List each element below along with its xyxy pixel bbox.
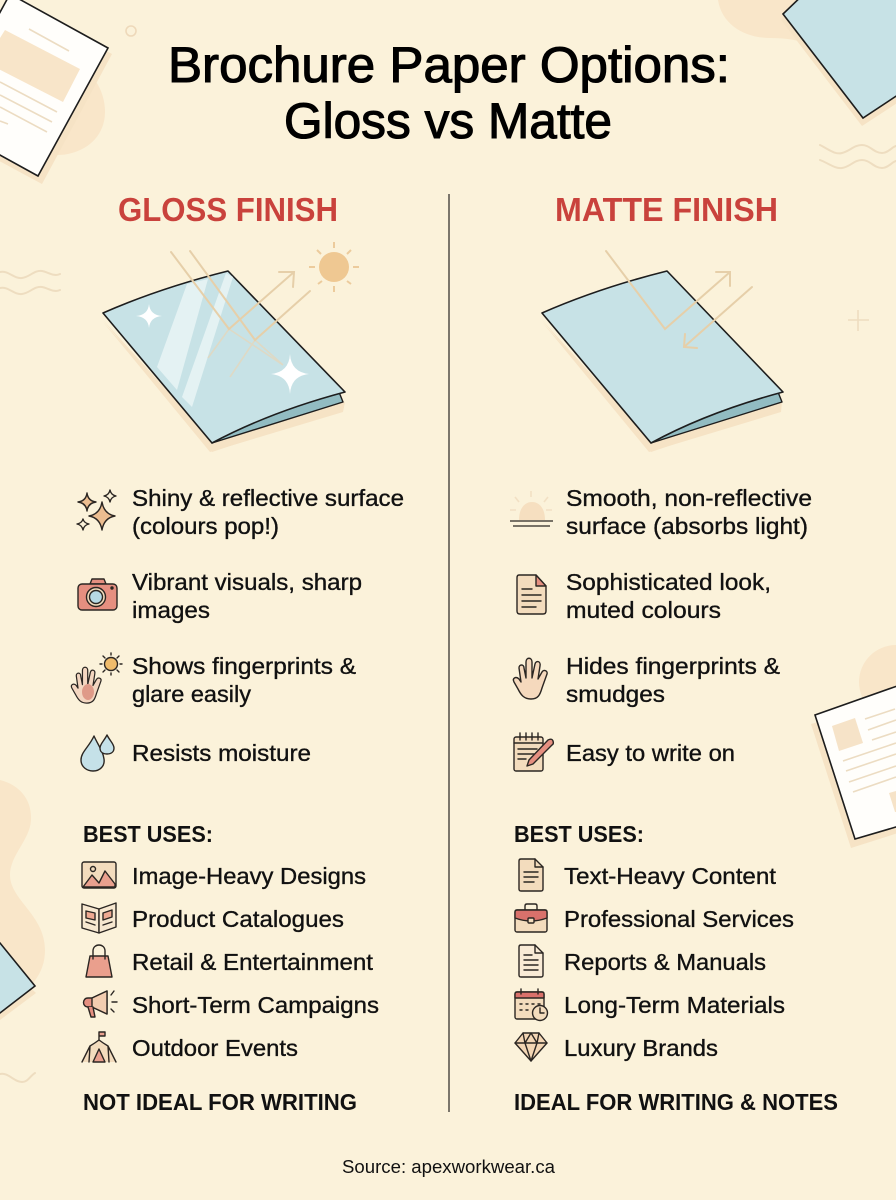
matte best uses <box>514 821 794 1061</box>
feature: sophisticated <box>517 569 771 623</box>
icon: shopping bag <box>86 945 112 977</box>
use: text-heavy content: Text-Heavy Content <box>564 863 777 889</box>
decoration: top-right paper <box>718 0 896 126</box>
icon: hand <box>513 658 547 699</box>
icon: text document <box>519 859 543 891</box>
use: long-term materials: Long-Term Materials <box>564 992 785 1018</box>
icon: document <box>517 575 546 614</box>
decoration: right paper <box>811 645 896 848</box>
use: luxury brands <box>515 1033 718 1061</box>
decoration: top-right waves <box>820 145 896 168</box>
use: retail and entertainment: Retail & Entertainment <box>132 949 374 975</box>
icon: sparkles <box>77 490 116 530</box>
use: product catalogues <box>82 903 344 933</box>
use: reports and manuals: Reports & Manuals <box>564 949 766 975</box>
note: ideal for writing: IDEAL FOR WRITING & NOTES <box>514 1089 838 1115</box>
feature: moisture <box>81 735 311 771</box>
icon: briefcase <box>515 904 547 932</box>
feature: hides fingerprints: smudges <box>566 681 665 707</box>
decoration: left waves <box>0 271 60 294</box>
feature: vibrant: images <box>132 597 210 623</box>
title <box>168 37 730 149</box>
feature: sophisticated: Sophisticated look, <box>566 569 771 595</box>
use: reports and manuals <box>519 945 766 977</box>
source line: Source: apexworkwear.ca <box>342 1157 556 1177</box>
heading: gloss finish: GLOSS FINISH <box>118 191 338 228</box>
heading: matte finish: MATTE FINISH <box>555 191 778 228</box>
decoration: small circle <box>126 26 136 36</box>
feature: fingerprints: glare easily <box>132 681 252 707</box>
use: image-heavy designs: Image-Heavy Designs <box>132 863 366 889</box>
feature: shiny <box>77 485 404 539</box>
icon: notepad and pen <box>514 733 553 771</box>
feature: shiny: Shiny & reflective surface <box>132 485 404 511</box>
icon: open catalogue <box>82 903 116 933</box>
icon: camera <box>78 579 117 610</box>
use: outdoor events: Outdoor Events <box>132 1035 298 1061</box>
icon: report <box>519 945 543 977</box>
feature: sophisticated: muted colours <box>566 597 721 623</box>
use: text-heavy content <box>519 859 777 891</box>
center divider <box>448 194 450 1112</box>
panel: matte finish <box>510 191 838 1115</box>
feature: non-reflective <box>510 485 812 539</box>
feature: hides fingerprints <box>513 653 780 707</box>
use: outdoor events <box>82 1032 298 1062</box>
icon: water drops <box>81 735 114 771</box>
use: professional services: Professional Services <box>564 906 794 932</box>
feature: moisture: Resists moisture <box>132 740 311 766</box>
decoration: bottom-left wave <box>0 1073 35 1082</box>
panel: gloss finish <box>71 191 404 1115</box>
subheading: best uses: BEST USES: <box>514 821 644 847</box>
use: retail and entertainment <box>86 945 374 977</box>
feature: non-reflective: Smooth, non-reflective <box>566 485 812 511</box>
icon: sun <box>309 242 359 292</box>
icon: sun on horizon <box>510 491 553 526</box>
icon: calendar and clock <box>515 989 548 1020</box>
icon: picture <box>82 862 116 888</box>
illustration: glossy brochure <box>103 242 359 452</box>
use: long-term materials <box>515 989 785 1020</box>
feature: easy to write on: Easy to write on <box>566 740 735 766</box>
icon: tent <box>82 1032 116 1062</box>
decoration: bottom-left paper <box>0 780 45 1020</box>
title: Brochure Paper Options: <box>168 37 730 93</box>
gloss feature list <box>71 485 404 771</box>
decoration: top-left paper <box>0 0 112 184</box>
feature: non-reflective: surface (absorbs light) <box>566 513 808 539</box>
feature: shiny: (colours pop!) <box>132 513 279 539</box>
icon: hand with glare <box>71 653 122 703</box>
matte feature list <box>510 485 812 771</box>
note: not ideal for writing: NOT IDEAL FOR WRITING <box>83 1089 357 1115</box>
use: short-term campaigns: Short-Term Campaigns <box>132 992 379 1018</box>
subheading: best uses: BEST USES: <box>83 821 213 847</box>
feature: vibrant <box>78 569 362 623</box>
illustration: matte brochure <box>542 251 783 452</box>
gloss best uses <box>82 821 379 1062</box>
decoration: plus <box>848 310 869 331</box>
title: Gloss vs Matte <box>284 93 612 149</box>
use: product catalogues: Product Catalogues <box>132 906 344 932</box>
feature: vibrant: Vibrant visuals, sharp <box>132 569 362 595</box>
feature: fingerprints <box>71 653 356 707</box>
feature: fingerprints: Shows fingerprints & <box>132 653 356 679</box>
icon: megaphone <box>84 991 117 1017</box>
icon: diamond <box>515 1033 547 1061</box>
use: luxury brands: Luxury Brands <box>564 1035 718 1061</box>
feature: hides fingerprints: Hides fingerprints & <box>566 653 780 679</box>
feature: easy to write on <box>514 733 735 771</box>
